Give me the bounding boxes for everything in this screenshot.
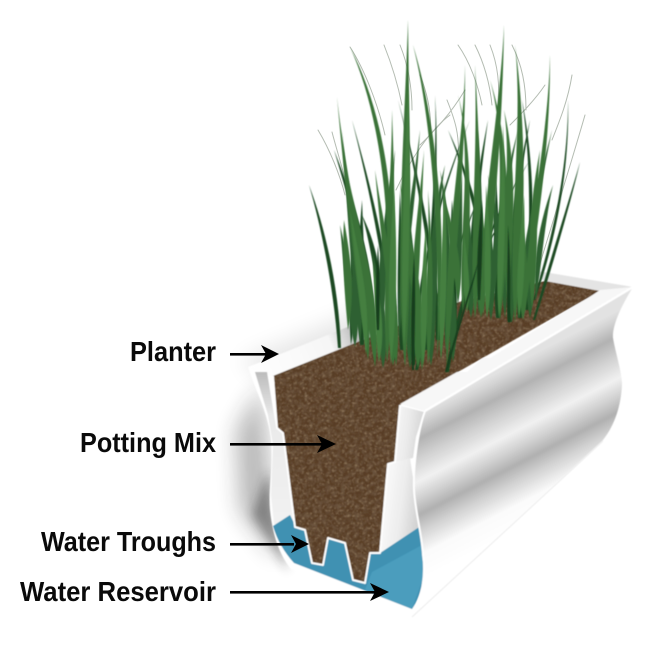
front rim xyxy=(400,287,633,411)
grass: shaded green blades xyxy=(340,130,553,368)
label: Water Troughs: Water Troughs xyxy=(41,526,216,557)
outer shell left profile xyxy=(248,367,425,617)
water reservoir xyxy=(273,515,424,609)
arrow: Potting Mix xyxy=(230,435,336,453)
panel bottom edge xyxy=(412,441,603,617)
back rim left xyxy=(248,282,458,376)
shadow behind planter xyxy=(236,272,450,572)
inner liner outline xyxy=(273,376,400,583)
back rim right xyxy=(530,270,633,291)
potting mix: top surface and cut face xyxy=(273,281,600,583)
grass: light green highlights xyxy=(350,90,525,366)
outer front panel xyxy=(412,287,633,616)
arrow: Planter xyxy=(230,345,279,363)
planter illustration xyxy=(248,270,633,617)
grass: mid green blades xyxy=(337,20,550,370)
front rim highlight xyxy=(425,287,633,411)
grass: dark blades behind xyxy=(309,95,580,372)
labels and arrows xyxy=(20,336,389,607)
panel edge line xyxy=(412,411,425,616)
arrow: Water Reservoir xyxy=(230,583,389,601)
grass: dark blades in front xyxy=(376,200,510,372)
label: Potting Mix: Potting Mix xyxy=(80,427,216,458)
right wall upper channel xyxy=(388,406,424,464)
right wall lower channel xyxy=(380,458,422,553)
label: Water Reservoir: Water Reservoir xyxy=(20,576,216,607)
arrow: Water Troughs xyxy=(230,535,309,553)
wisps: faded grass tips xyxy=(318,45,585,270)
left wall channel xyxy=(255,372,294,526)
label: Planter: Planter xyxy=(130,336,216,367)
